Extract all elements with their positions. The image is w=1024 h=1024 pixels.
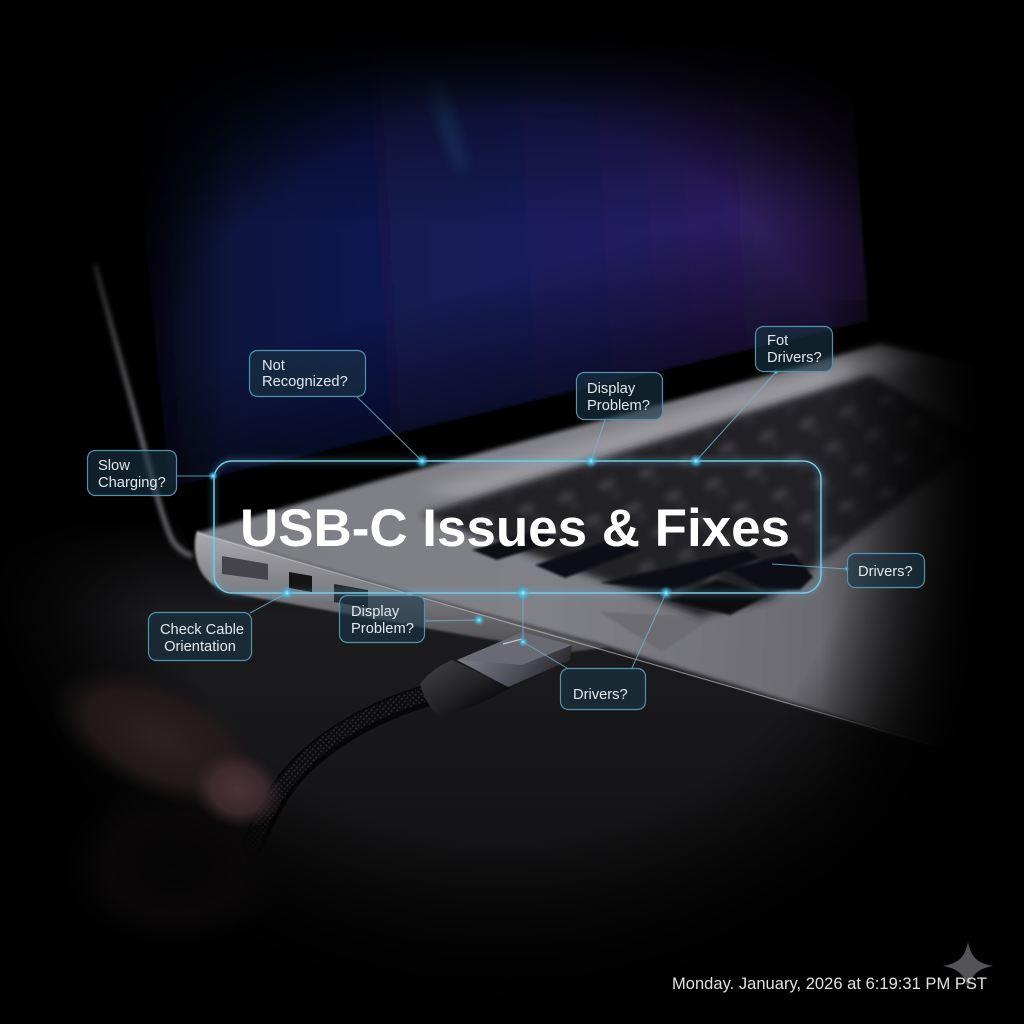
right side fade (820, 300, 1024, 810)
title: USB-C Issues & Fixes (240, 499, 790, 558)
ports (222, 556, 268, 580)
label: Fot Drivers? (756, 326, 832, 372)
label: Slow Charging? (88, 450, 176, 496)
photo: laptop lid and screen (92, 0, 880, 556)
label: Drivers? (right): Drivers? (858, 564, 913, 580)
label: Display Problem? (lower) (340, 596, 424, 642)
label: Not Recognized?: Not (262, 358, 285, 374)
label: Check Cable Orientation: Orientation (164, 639, 236, 655)
label: Display Problem? (top): Problem? (587, 398, 650, 414)
label: Not Recognized?: Recognized? (262, 374, 348, 390)
label: Drivers? (right) (848, 554, 924, 588)
label: Check Cable Orientation (148, 612, 252, 660)
label: Slow Charging?: Slow (98, 458, 130, 474)
label: Slow Charging?: Charging? (98, 475, 166, 491)
label: Fot Drivers?: Fot (767, 333, 788, 349)
timestamp: Monday. January, 2026 at 6:19:31 PM PST (672, 975, 987, 993)
label: Not Recognized? (250, 350, 366, 396)
title frame (214, 461, 821, 593)
label: Fot Drivers?: Drivers? (767, 350, 822, 366)
icon: sparkle (943, 942, 993, 990)
photo: laptop base (195, 345, 1000, 790)
label: Check Cable Orientation: Check Cable (160, 622, 244, 638)
label: Display Problem? (lower): Problem? (351, 621, 414, 637)
label: Drivers? (bottom) (560, 668, 646, 710)
label: Display Problem? (top) (576, 372, 662, 420)
glow dots (208, 369, 850, 647)
photo: blurred hand (29, 637, 292, 950)
photo: keyboard (420, 375, 985, 617)
label: Drivers? (bottom): Drivers? (573, 687, 628, 703)
label: Display Problem? (lower): Display (351, 604, 400, 620)
connector lines (177, 372, 847, 668)
photo: cable and connector (252, 632, 572, 846)
label: Display Problem? (top): Display (587, 381, 636, 397)
